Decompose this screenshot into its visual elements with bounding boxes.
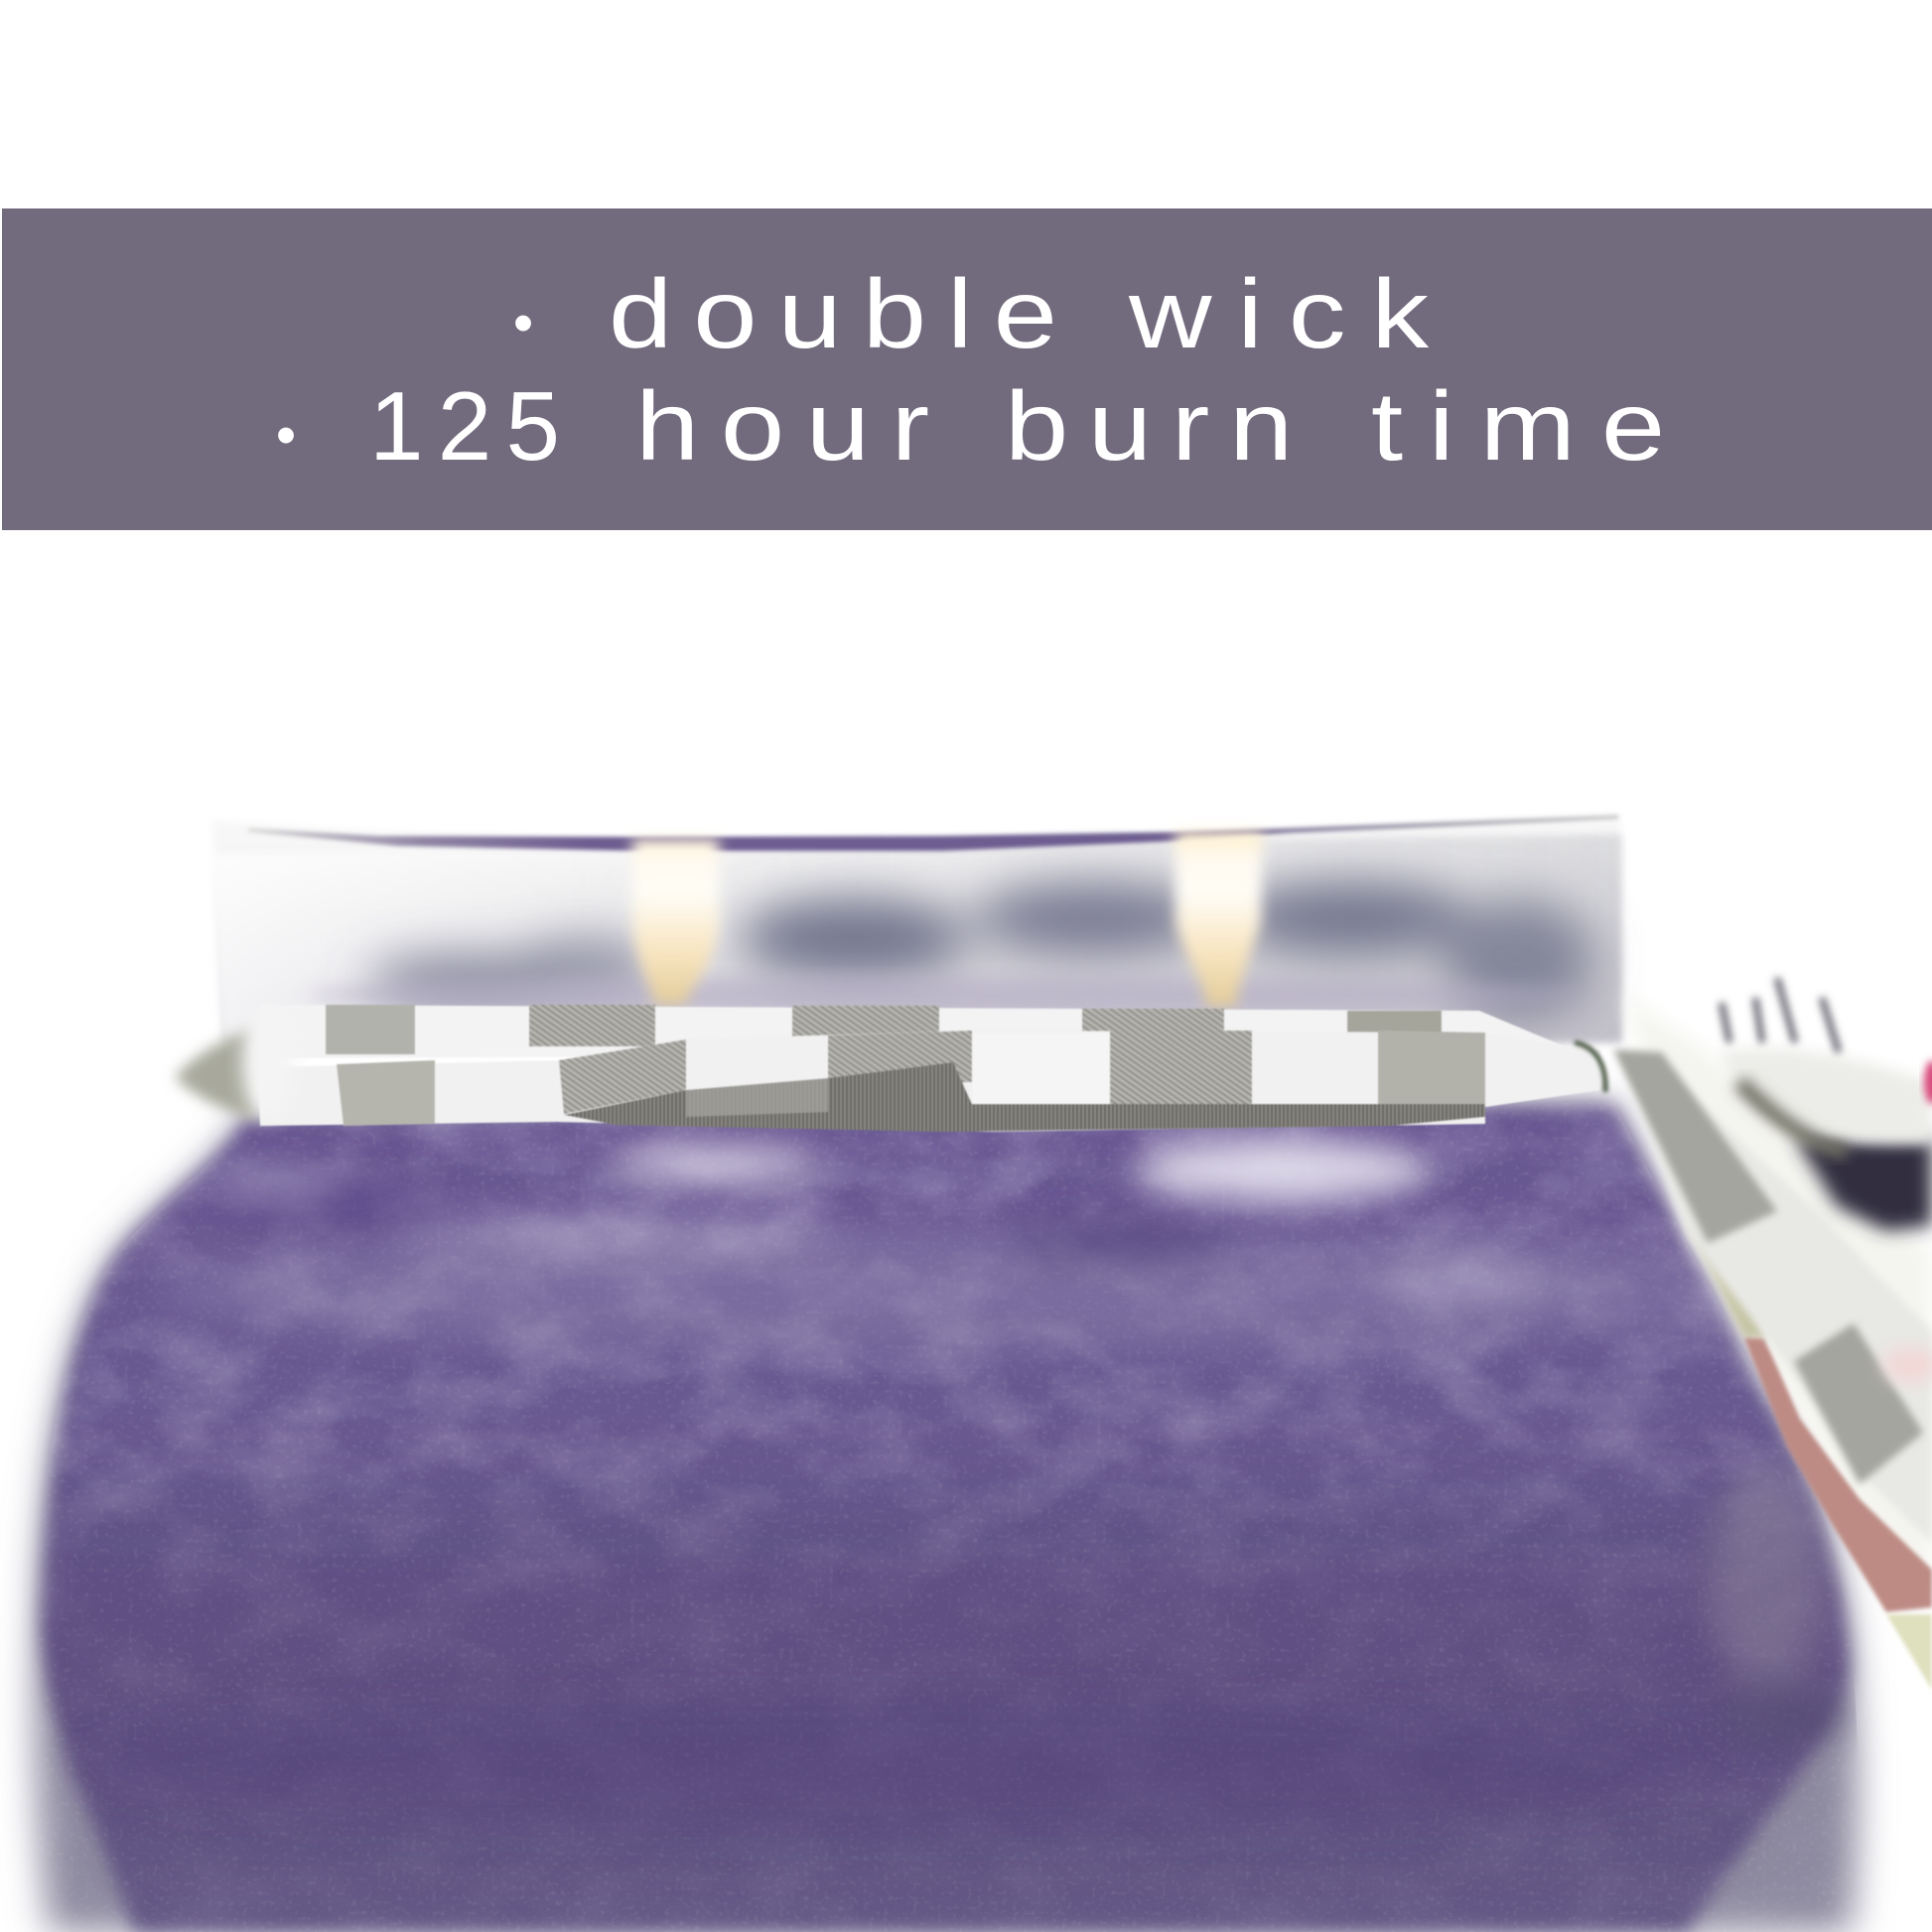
line: double wick: wick	[1128, 259, 1430, 368]
smudges seen through the glass	[367, 883, 1593, 1018]
lavender bunch	[1795, 1139, 1932, 1231]
ribbon and label at right	[1575, 978, 1932, 1690]
purple wax body	[0, 1102, 1932, 1932]
cloth strip top	[260, 1005, 1579, 1058]
mottled wax texture	[52, 1108, 1797, 1847]
cloth tail left	[175, 1030, 260, 1122]
line: 125 hour burn time: hour	[635, 371, 929, 481]
purple rim line	[248, 815, 1618, 851]
line: 125 hour burn time: 125	[369, 371, 560, 481]
gingham cloth tie	[175, 1005, 1600, 1132]
line: double wick	[513, 259, 1430, 368]
white tag	[1719, 1049, 1932, 1143]
ribbon body	[1620, 1052, 1932, 1544]
candle jar photo	[0, 814, 1932, 1932]
line: 125 hour burn time: burn	[1005, 371, 1293, 481]
pink strip	[1744, 1338, 1932, 1612]
dark stitch on ribbon knot	[1575, 1042, 1605, 1092]
wax light and shadow patches	[79, 1172, 1747, 1837]
yellow strip lower	[1886, 1614, 1932, 1690]
lavender sprig tips	[1722, 978, 1839, 1052]
pale pink patch	[1883, 1347, 1932, 1383]
cloth strip lower	[258, 1031, 1600, 1132]
flame right	[1175, 832, 1262, 1007]
white haze beside jar	[1624, 993, 1932, 1588]
line: 125 hour burn time: time	[1371, 371, 1665, 481]
line: 125 hour burn time: •	[276, 403, 296, 468]
ribbon gray checks	[1613, 1049, 1923, 1484]
line: double wick: •	[513, 291, 533, 355]
right side reflection on the wax	[1708, 1469, 1827, 1688]
glass jar rim	[212, 814, 1622, 1042]
pink flower edge	[1924, 1060, 1932, 1104]
yellow strip	[1688, 1216, 1767, 1338]
soft left end of cloth	[242, 1005, 294, 1120]
line: double wick: double	[609, 259, 1057, 368]
flame left	[632, 839, 719, 1005]
purple banner	[2, 208, 1932, 530]
line: 125 hour burn time	[276, 371, 1665, 481]
